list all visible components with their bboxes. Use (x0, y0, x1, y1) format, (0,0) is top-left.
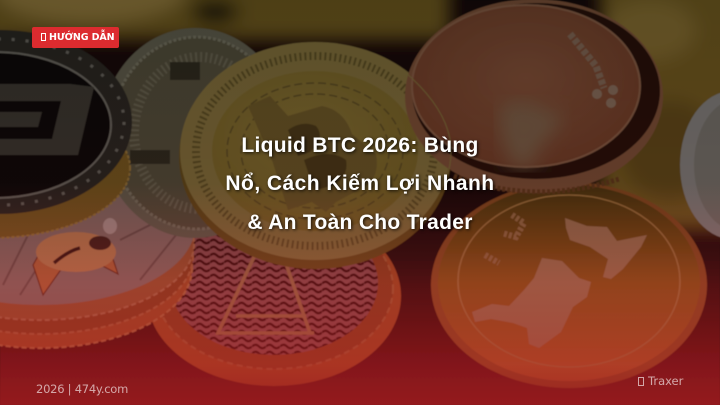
footer: year and site: 2026 | 474y.com (36, 382, 128, 396)
badge: category label: HƯỚNG DẪN (49, 32, 115, 43)
title line 1: Liquid BTC 2026: Bùng (241, 134, 479, 157)
badge: category label (32, 27, 119, 48)
main coin edge over copper (405, 72, 451, 203)
coin: silver behind main (101, 28, 289, 238)
footer: brand: Traxer (648, 374, 683, 388)
coin: xrp bottom-right (431, 182, 707, 388)
blurred gold background (0, 0, 720, 230)
coin: right silver (680, 91, 720, 239)
coin: dark dash (0, 98, 130, 238)
coin: bottom-centre stamped triangle (147, 206, 401, 386)
coin: main bitcoin (179, 45, 451, 269)
icon: shiba dog face (33, 218, 118, 295)
coin: copper top right (405, 0, 663, 193)
coin: shiba stack left (0, 188, 192, 348)
title line 3: & An Toàn Cho Trader (247, 211, 473, 234)
title line 2: Nổ, Cách Kiếm Lợi Nhanh (225, 172, 495, 195)
